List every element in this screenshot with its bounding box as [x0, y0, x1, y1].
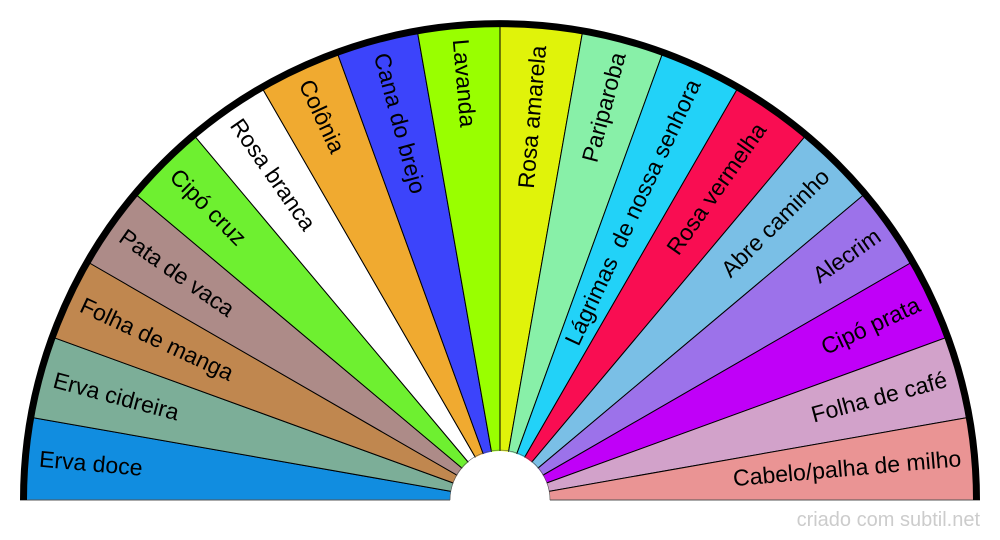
sector: Abre caminho: Abre caminho — [716, 163, 834, 282]
sector: Rosa branca: Rosa branca — [225, 114, 321, 235]
sector: Alecrim: Alecrim — [808, 223, 885, 288]
watermark: criado com subtil.net — [797, 509, 980, 531]
sector: Erva cidreira: Erva cidreira — [51, 367, 182, 425]
sector: Rosa vermelha — [500, 88, 806, 500]
sector: Alecrim — [500, 194, 912, 500]
sector: Rosa vermelha: Rosa vermelha — [661, 118, 771, 259]
sector: Lavanda: Lavanda — [448, 38, 481, 128]
central hub hole — [450, 451, 550, 501]
sector: Pata de vaca — [88, 194, 500, 500]
sector: Rosa amarela: Rosa amarela — [513, 44, 551, 189]
sector: Folha de manga — [53, 262, 500, 500]
sector: Cipó prata: Cipó prata — [817, 291, 924, 360]
sector: Cana do brejo: Cana do brejo — [369, 50, 431, 196]
sector: Erva doce — [24, 417, 500, 500]
sector: Rosa amarela — [500, 24, 583, 500]
sector: Lágrimas de nossa senhora: Lágrimas de nossa senhora — [559, 75, 706, 349]
sector: Colônia: Colônia — [294, 75, 350, 157]
sector: Cipó prata — [500, 262, 947, 500]
sector: Erva cidreira — [31, 337, 500, 500]
sector: Pata de vaca: Pata de vaca — [115, 224, 240, 322]
baseline left — [20, 500, 450, 501]
sector: Cana do brejo — [337, 31, 500, 500]
hub edge — [450, 450, 550, 500]
sector: Cabelo/palha de milho — [500, 417, 976, 500]
sector: Folha de café — [500, 337, 969, 500]
sector: Folha de manga: Folha de manga — [76, 292, 238, 386]
sector: Pariparoba — [500, 31, 663, 500]
sector: Abre caminho — [500, 135, 865, 500]
sector: Erva doce: Erva doce — [38, 446, 144, 481]
baseline right — [550, 500, 980, 501]
sector: Cipó cruz: Cipó cruz — [165, 163, 252, 251]
sector: Lavanda — [417, 24, 500, 500]
sector: Colônia — [262, 53, 500, 500]
sector: Folha de café: Folha de café — [808, 366, 950, 427]
sector: Pariparoba: Pariparoba — [577, 49, 631, 165]
sector: Rosa branca — [194, 88, 500, 500]
sector: Lágrimas de nossa senhora — [500, 53, 738, 500]
sector: Cabelo/palha de milho: Cabelo/palha de milho — [732, 445, 962, 491]
sector: Cipó cruz — [135, 135, 500, 500]
